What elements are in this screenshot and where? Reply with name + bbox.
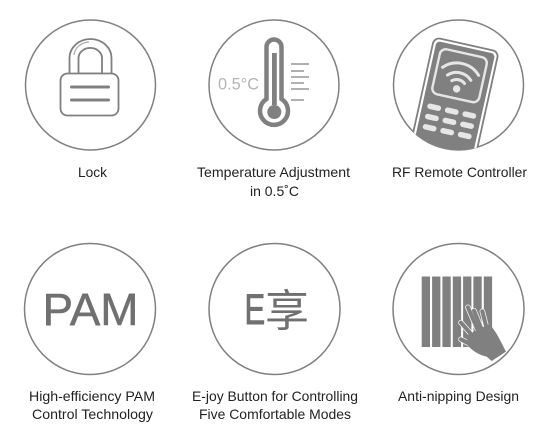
panel: anti-nipping design bbox=[393, 244, 524, 404]
icon: thermometer: 0.5°C bbox=[218, 74, 259, 94]
label: pam control: High-efficiency PAM bbox=[29, 388, 155, 404]
icon: e-joy: 享 bbox=[265, 287, 309, 336]
label: e-joy button: Five Comfortable Modes bbox=[199, 406, 351, 422]
label: temperature adjustment: in 0.5˚C bbox=[250, 183, 299, 199]
label: rf remote controller: RF Remote Controller bbox=[392, 164, 527, 180]
panel: rf remote controller bbox=[392, 20, 527, 186]
label: pam control bbox=[29, 388, 155, 422]
label: anti-nipping design: Anti-nipping Design bbox=[398, 388, 519, 404]
panel: temperature adjustment bbox=[197, 20, 350, 199]
icon: e-joy: E bbox=[244, 285, 265, 333]
icon: grille and hand bbox=[393, 244, 524, 374]
panel: lock bbox=[26, 20, 156, 180]
label: e-joy button bbox=[192, 388, 358, 422]
icon: thermometer bbox=[209, 20, 339, 150]
label: e-joy button: E-joy Button for Controlling bbox=[192, 388, 358, 404]
label: temperature adjustment bbox=[197, 164, 350, 199]
icon: lock bbox=[26, 20, 156, 150]
icon: pam: PAM bbox=[42, 284, 138, 335]
icon: remote controller bbox=[392, 19, 524, 151]
label: lock: Lock bbox=[78, 164, 108, 180]
label: pam control: Control Technology bbox=[32, 406, 153, 422]
panel: e-joy button bbox=[192, 244, 358, 422]
panel: pam control bbox=[24, 244, 156, 422]
icon: e-joy bbox=[209, 244, 340, 374]
icon: pam bbox=[24, 244, 156, 374]
label: temperature adjustment: Temperature Adjustment bbox=[197, 164, 350, 180]
